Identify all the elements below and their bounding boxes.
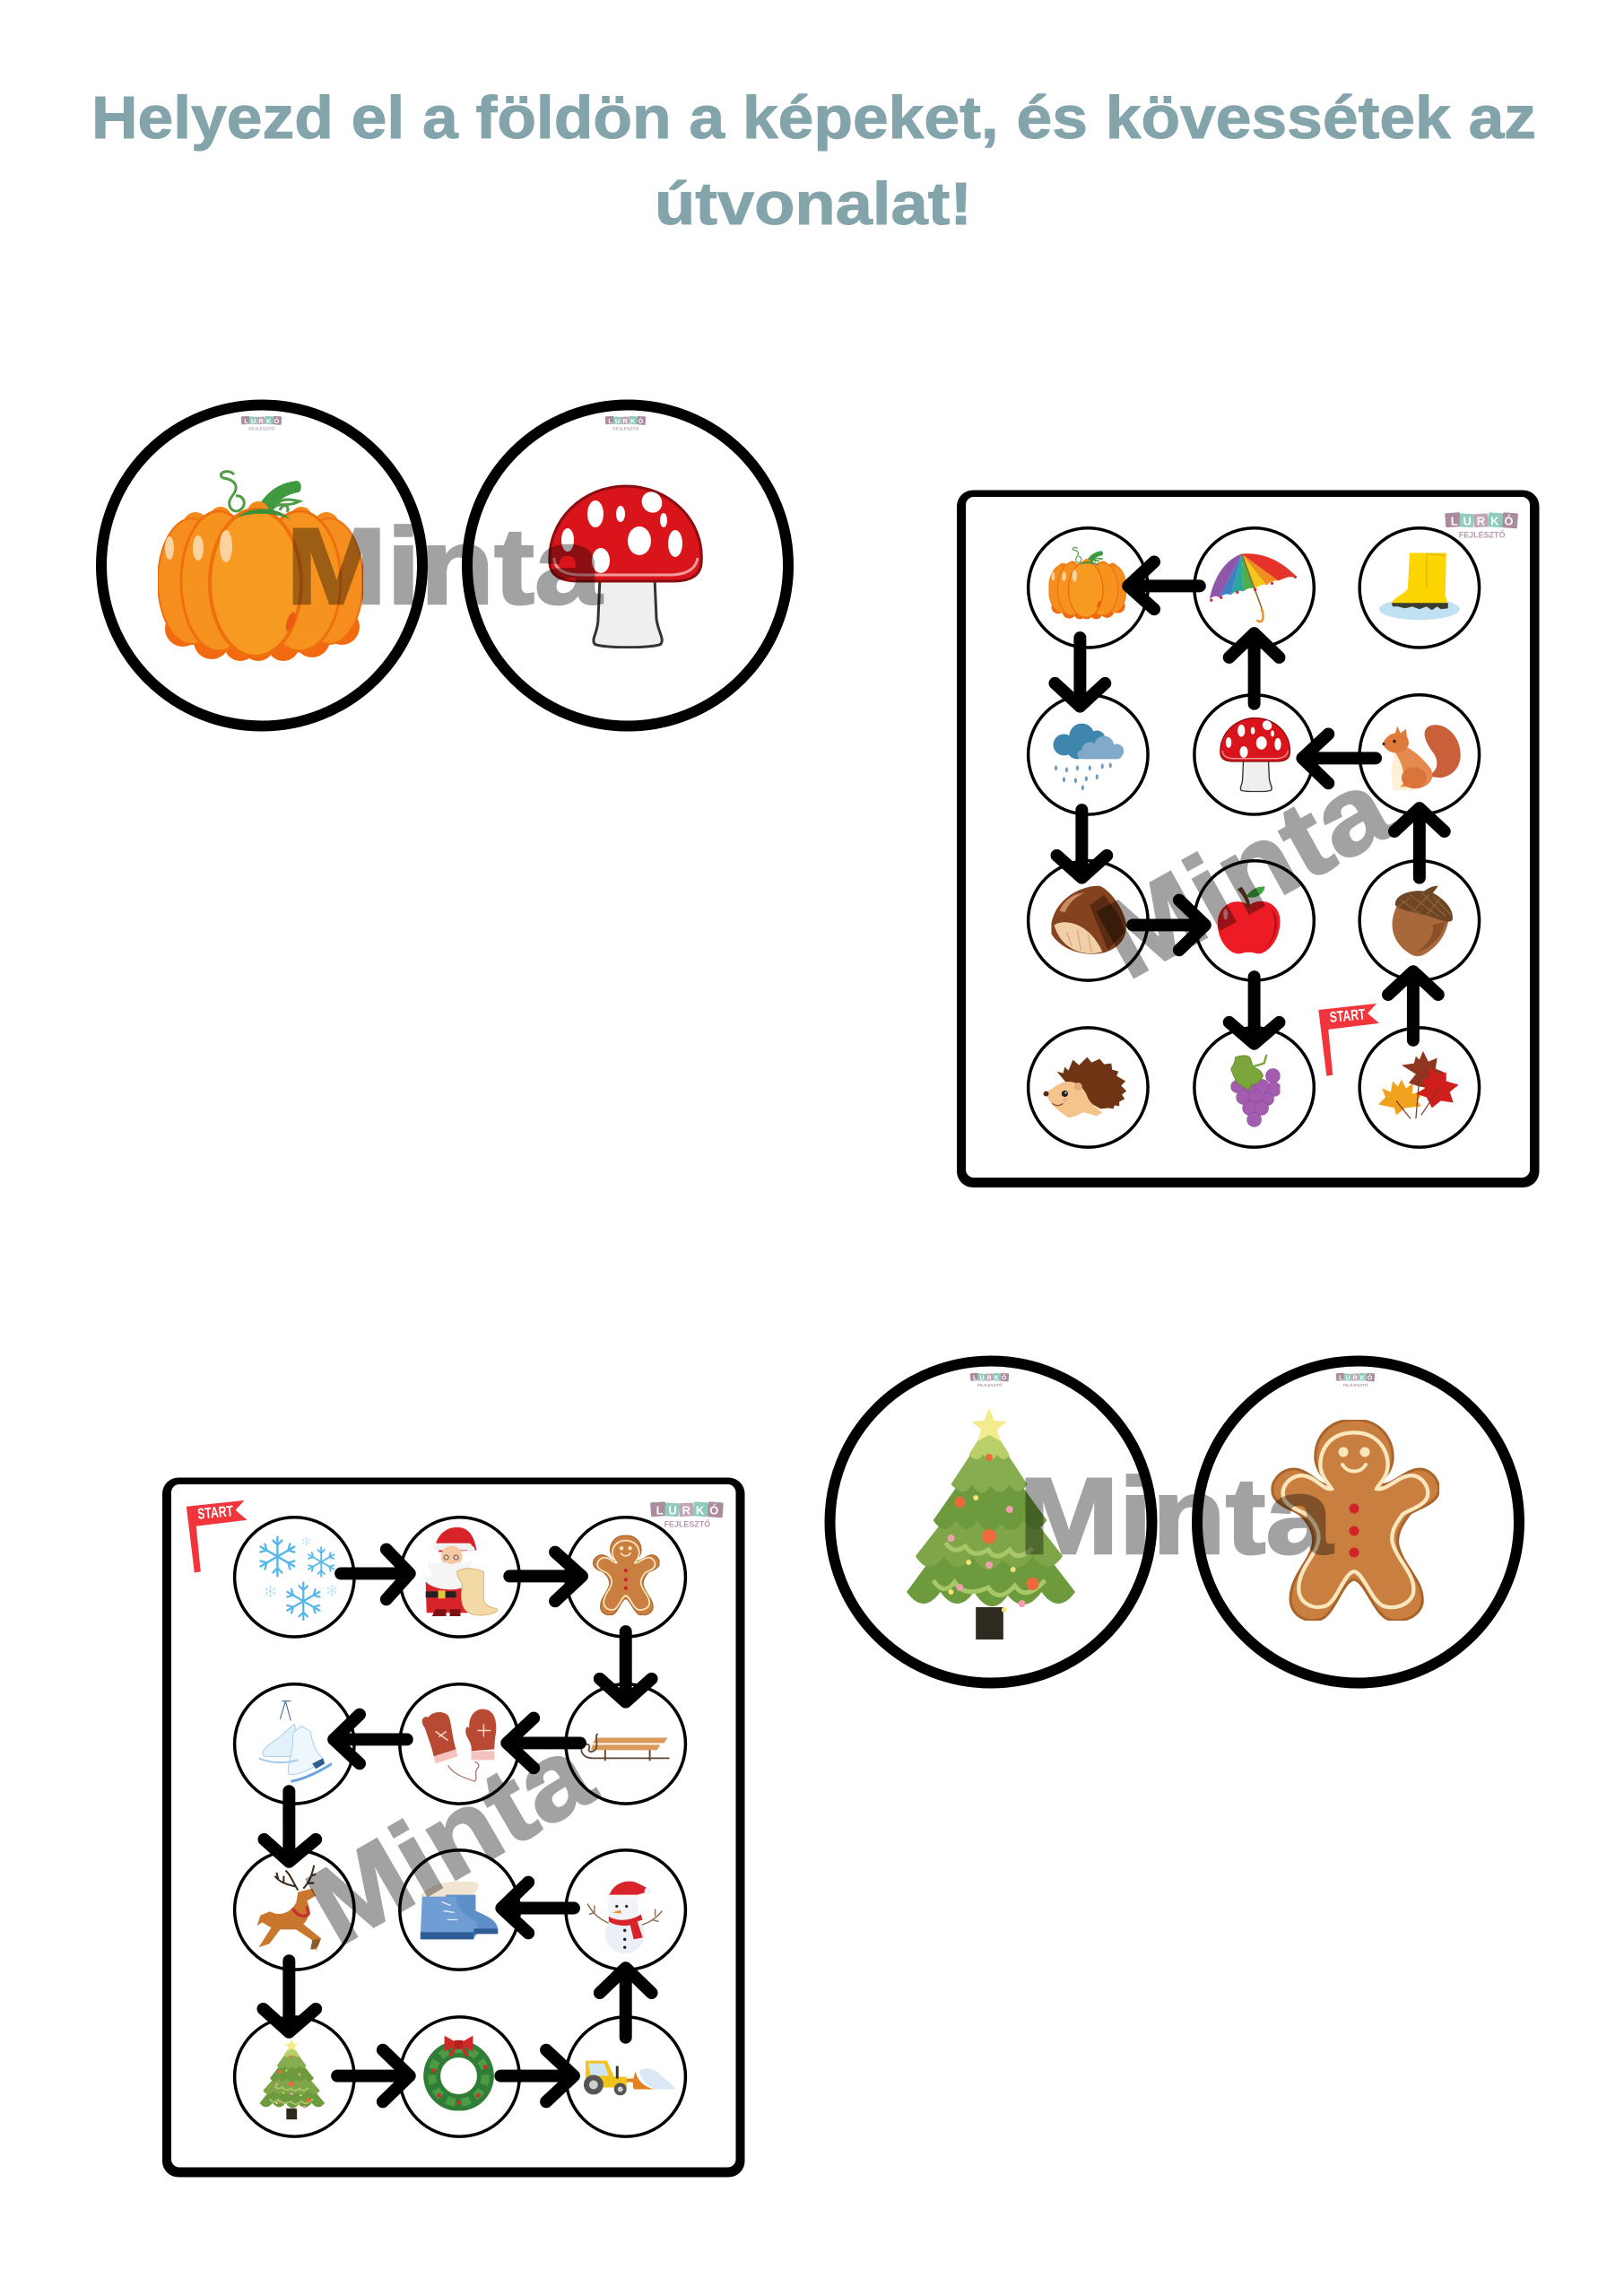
icon: rain boot [1379, 553, 1460, 620]
panel: autumn path board [957, 490, 1539, 1187]
icon: mittens [422, 1709, 496, 1781]
icon: squirrel [1383, 725, 1461, 790]
icon: umbrella [1210, 553, 1297, 622]
icon: hedgehog [1044, 1057, 1126, 1118]
start flag: START [1329, 1005, 1367, 1026]
icon: pumpkin [1049, 547, 1126, 619]
icon: snow plow tractor [584, 2061, 675, 2095]
icon: christmas tree [259, 2039, 325, 2119]
icon: mushroom [1220, 718, 1290, 792]
circle card: gingerbread: LURKÓ [1339, 1373, 1373, 1381]
circle card: christmas tree: LURKÓ [973, 1373, 1007, 1381]
start flag [187, 1500, 248, 1572]
circle card: gingerbread [1197, 1361, 1519, 1683]
logo: FEJLESZTŐ [664, 1519, 710, 1529]
watermark: winter board: Minta [288, 1710, 612, 1969]
title: útvonalat! [655, 170, 972, 238]
circle card: christmas tree: FEJLESZTŐ [977, 1382, 1003, 1388]
icon: snow boots [421, 1882, 498, 1939]
logo [650, 1501, 724, 1529]
logo: LURKÓ [656, 1504, 718, 1518]
icon: gingerbread [594, 1535, 659, 1615]
icon: snowman [587, 1882, 663, 1953]
icon: acorn [1393, 886, 1453, 956]
watermark: right: Minta [1019, 1455, 1334, 1577]
icon: grapes [1231, 1055, 1281, 1126]
arrows: autumn route [1055, 562, 1445, 1044]
watermark: autumn board: Minta [1080, 744, 1411, 1002]
icon: rain cloud [1053, 724, 1124, 790]
icon: santa [423, 1527, 498, 1616]
logo: LURKÓ [1451, 515, 1513, 528]
circle card: pumpkin: LURKÓ [244, 417, 280, 425]
arrows: winter route [263, 1550, 652, 2101]
circle card: mushroom: LURKÓ [608, 417, 644, 425]
title [91, 84, 1536, 238]
icon: reindeer [256, 1866, 321, 1951]
card pair: pumpkin and mushroom [101, 405, 788, 726]
circle card: pumpkin: FEJLESZTŐ [248, 426, 274, 432]
circle card: pumpkin [101, 405, 422, 726]
start flag [1318, 1004, 1379, 1076]
circle card: mushroom: FEJLESZTŐ [612, 426, 638, 432]
circle card: gingerbread: FEJLESZTŐ [1343, 1382, 1368, 1388]
icon: snowflakes [260, 1537, 336, 1620]
icon: autumn leaves [1378, 1051, 1459, 1118]
icon: apple [1218, 886, 1280, 953]
circle card: christmas tree [830, 1361, 1151, 1683]
logo [1445, 512, 1518, 540]
watermark: top left: Minta [286, 505, 604, 627]
card pair: tree and gingerbread [830, 1361, 1519, 1683]
icon: chestnut [1052, 886, 1126, 954]
title: Helyezd el a földön a képeket, és kövessétek az [91, 84, 1536, 152]
icon: wreath [431, 2036, 488, 2105]
icon: ice skates [258, 1701, 332, 1781]
logo: FEJLESZTŐ [1459, 530, 1505, 540]
icon: sled [581, 1734, 670, 1761]
circle card: mushroom [467, 405, 788, 726]
panel: winter path board [162, 1478, 744, 2178]
start flag: START [196, 1502, 234, 1523]
